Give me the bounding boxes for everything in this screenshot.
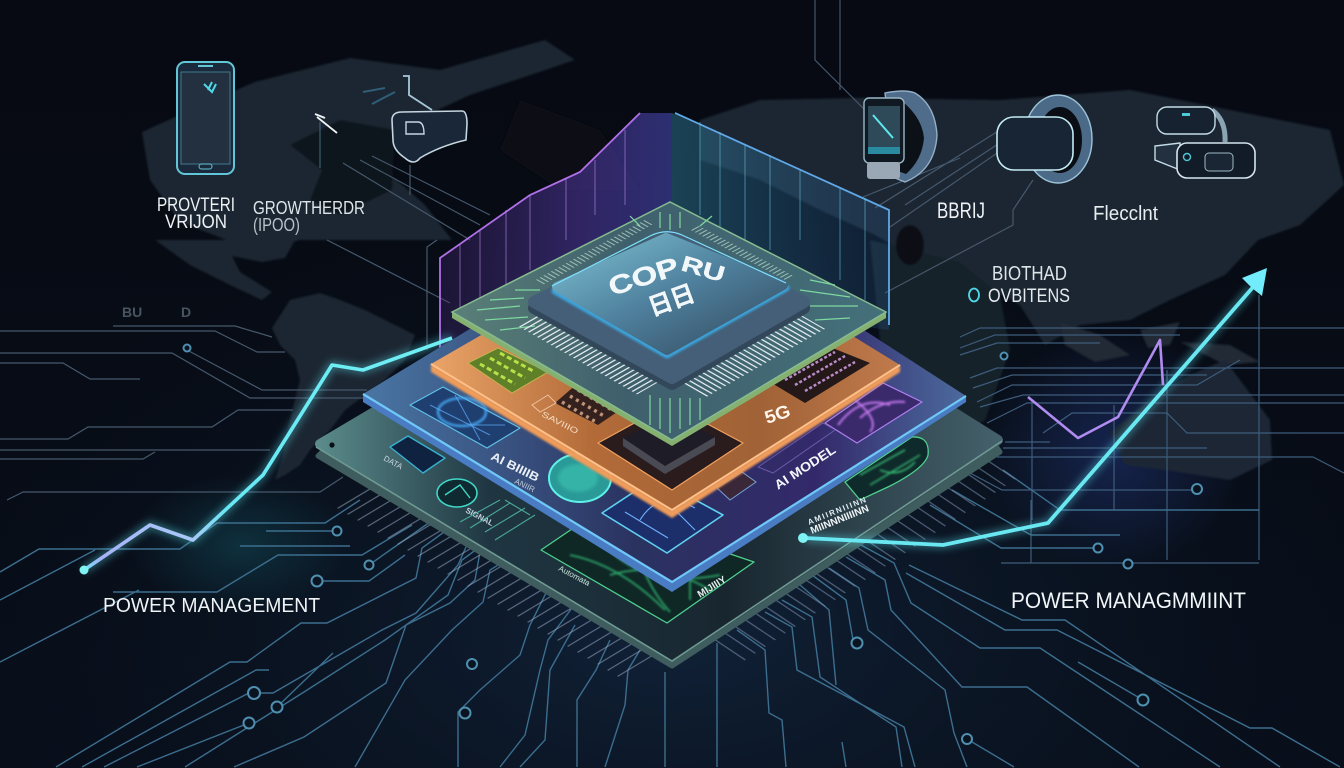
chip label: RU	[679, 251, 728, 287]
label: growth line two: (IPOO)	[253, 215, 300, 235]
teal circle	[549, 454, 611, 502]
chip label: COP	[605, 251, 682, 302]
orange: dotted module: SAVIIIO	[540, 410, 580, 436]
label: ovbitens: OVBITENS	[988, 286, 1070, 307]
label: left plate text: AI BIIIIB	[489, 449, 542, 485]
base panel: green circuit	[541, 510, 754, 623]
plate: orange	[431, 225, 900, 518]
orange: code panel	[770, 347, 870, 403]
chip label: 日	[645, 288, 677, 322]
icon: compass pointer	[315, 114, 337, 168]
plate: base board	[316, 236, 1002, 666]
plate: blue	[363, 206, 966, 592]
device: AR glasses	[1155, 107, 1255, 178]
label: biothad: BIOTHAD	[992, 263, 1067, 285]
label: BBRU: BBRIJ	[937, 198, 985, 223]
holographic back panels	[440, 113, 889, 360]
chip label: 日	[667, 280, 699, 314]
blue panel: neural left	[410, 387, 520, 448]
base panel: text block left: SIGNAL	[464, 506, 495, 528]
circuit traces: upper and mid background	[0, 0, 1050, 500]
base panel: text block left	[382, 436, 535, 540]
base panel: green circuit right	[845, 437, 928, 500]
line chart: left growth line	[80, 338, 452, 574]
orange: dotted module	[532, 383, 620, 436]
label: left plate text	[489, 449, 542, 494]
blue panel: bottom centre	[602, 478, 723, 553]
circuit traces: lower board	[0, 470, 1340, 767]
device: VR headset	[997, 95, 1092, 183]
comb of short traces beside the board	[372, 458, 985, 658]
label: power management right: POWER MANAGMMIINT	[1011, 588, 1246, 613]
label: Fleccint: Flecclnt	[1093, 203, 1158, 225]
plate: green top with chip	[452, 202, 886, 446]
icon: cyan ring	[969, 288, 979, 302]
blue panel: neural purple right	[758, 383, 922, 473]
label: power management left: POWER MANAGEMENT	[103, 595, 320, 617]
base: right fine print: MIINNNIIIINN	[809, 503, 871, 537]
device: phone	[177, 62, 234, 174]
chip pins on plate	[477, 212, 858, 433]
small module	[717, 472, 756, 500]
device: headset left	[363, 76, 467, 162]
line chart: purple secondary	[1028, 340, 1163, 438]
label: provider version line two: VRIJON	[165, 212, 227, 233]
circuit nodes	[184, 344, 1202, 744]
faint background text	[122, 304, 191, 320]
chip package	[534, 236, 804, 384]
chip pins bottom	[534, 318, 810, 388]
label: provider version: PROVTERI	[157, 195, 235, 216]
world map silhouette	[142, 40, 1344, 480]
label: left plate text: ANIIR	[513, 477, 536, 494]
orange: green memory chip	[468, 348, 548, 393]
line chart: right growth line and arrow	[798, 268, 1267, 545]
label: 5G: 5G	[762, 401, 793, 428]
base: right fine print: AMIIRNIIINN	[806, 495, 867, 527]
faint background text: BU	[122, 304, 142, 320]
base panel: green circuit: Automata	[557, 564, 592, 588]
chip label	[605, 251, 728, 322]
faint background text: D	[181, 304, 191, 320]
chip lid	[555, 238, 786, 355]
base panel: text block left: DATA	[382, 454, 405, 472]
device: smartwatch	[864, 91, 937, 182]
label: growth: GROWTHERDR	[253, 198, 365, 218]
base panel: green circuit: MIJIIIY	[696, 574, 729, 601]
orange: centre dark module	[598, 415, 743, 490]
label: AI model: AI MODEL	[771, 442, 838, 493]
